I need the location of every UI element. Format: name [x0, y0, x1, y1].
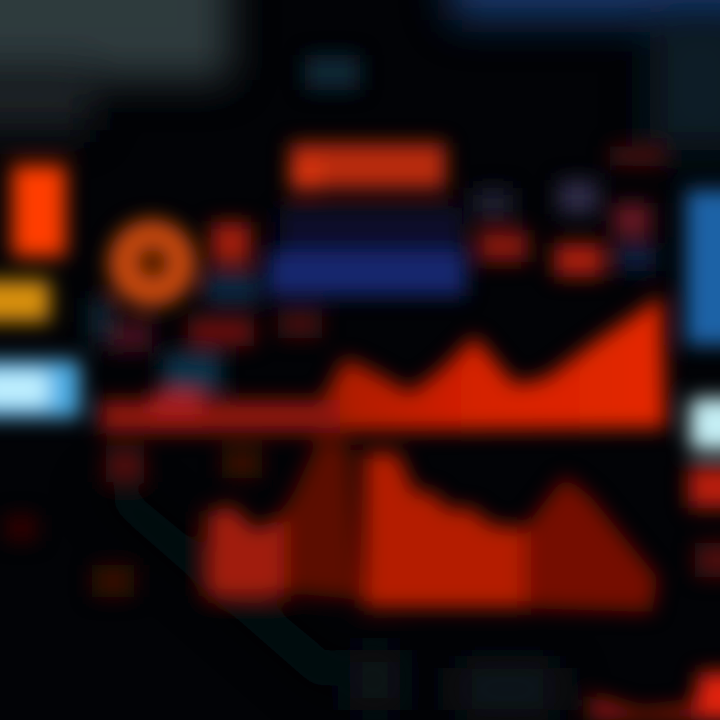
title — [290, 143, 446, 190]
small labels — [88, 298, 322, 478]
left rail: faint red marks — [5, 448, 144, 597]
donut chart — [123, 234, 181, 292]
left rail: yellow tile — [0, 280, 50, 322]
small stat block — [211, 222, 251, 264]
header band — [268, 208, 466, 296]
area chart — [100, 296, 666, 433]
right rail: red tile — [688, 466, 720, 508]
middle chart — [208, 436, 362, 600]
bar chart — [364, 452, 658, 612]
right rail: pale tile — [690, 398, 720, 450]
bottom right red corner — [590, 670, 720, 720]
right rail: dark red tile — [695, 543, 720, 577]
right rail: blue tile — [686, 190, 720, 345]
small blue stat — [205, 272, 259, 304]
left rail: orange tile — [12, 165, 66, 257]
left rail: light blue tile — [0, 360, 80, 418]
stat columns — [473, 146, 664, 277]
